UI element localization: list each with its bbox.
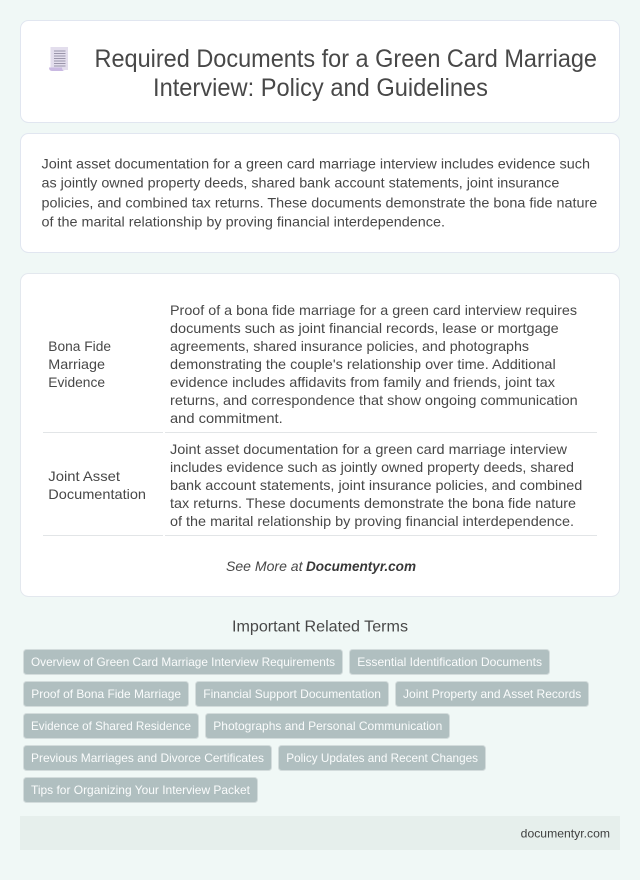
row label: Documentation — [48, 486, 146, 502]
panel: related term tags — [24, 650, 588, 802]
intro text: as jointly owned property deeds, shared bank account statements, joint insurance — [42, 175, 560, 191]
footer bar — [20, 816, 620, 850]
row: bona fide marriage evidence — [48, 302, 578, 426]
row label — [48, 338, 111, 390]
row description: evidence includes affidavits from family and friends, joint tax — [170, 374, 555, 390]
row label: Evidence — [48, 374, 105, 390]
tag: Photographs and Personal Communication — [213, 719, 442, 733]
tag — [278, 746, 486, 770]
tag — [196, 682, 388, 706]
row description — [170, 302, 578, 426]
see more link: See More at — [226, 558, 304, 574]
tag — [350, 650, 550, 674]
row description: bank account statements, joint insurance policies, and combined — [170, 477, 582, 493]
row: joint asset documentation — [48, 441, 582, 529]
row description: and commitment. — [170, 410, 283, 426]
title: Interview: Policy and Guidelines — [153, 74, 488, 102]
panel: evidence table — [20, 274, 620, 596]
panel: intro paragraph — [20, 134, 620, 252]
tag: Proof of Bona Fide Marriage — [31, 687, 181, 701]
tag — [206, 714, 450, 738]
see more link: Documentyr.com — [306, 558, 416, 574]
intro text — [42, 155, 598, 230]
tag: Evidence of Shared Residence — [31, 719, 191, 733]
row label: Marriage — [48, 356, 105, 372]
tag: Joint Property and Asset Records — [403, 687, 581, 701]
see more link — [226, 558, 416, 574]
tag: Tips for Organizing Your Interview Packet — [31, 783, 251, 797]
row description: includes evidence such as jointly owned property deeds, shared — [170, 459, 574, 475]
row description: Proof of a bona fide marriage for a green card interview requires — [170, 302, 577, 318]
title — [94, 45, 597, 102]
panel: title card — [20, 20, 620, 122]
title: Required Documents for a Green Card Marriage — [94, 45, 597, 73]
tag — [396, 682, 588, 706]
row description — [170, 441, 582, 529]
tag — [24, 650, 342, 674]
tag — [24, 746, 272, 770]
row description: Joint asset documentation for a green card marriage interview — [170, 441, 568, 457]
footer bar: documentyr.com — [521, 826, 610, 840]
tag: Previous Marriages and Divorce Certificates — [31, 751, 264, 765]
row description: documents such as joint financial records, lease or mortgage — [170, 320, 559, 336]
tag: Essential Identification Documents — [357, 655, 542, 669]
row label: Joint Asset — [48, 468, 120, 484]
row description: of the marital relationship by proving financial interdependence. — [170, 513, 574, 529]
icon: document — [49, 47, 68, 71]
tag: Overview of Green Card Marriage Interview Requirements — [31, 655, 335, 669]
intro text: policies, and combined tax returns. These documents demonstrate the bona fide nature — [42, 194, 598, 210]
tag — [24, 778, 258, 802]
intro text: Joint asset documentation for a green card marriage interview includes evidence such — [42, 155, 590, 171]
tag — [24, 714, 198, 738]
row description: returns, and correspondence that show ongoing communication — [170, 392, 578, 408]
row label — [48, 468, 146, 502]
tag: Financial Support Documentation — [203, 687, 381, 701]
row description: demonstrating the couple's relationship over time. Additional — [170, 356, 556, 372]
row description: tax returns. These documents demonstrate the bona fide nature — [170, 495, 576, 511]
row description: agreements, shared insurance policies, and photographs — [170, 338, 529, 354]
tag — [24, 682, 188, 706]
intro text: of the marital relationship by proving financial interdependence. — [42, 214, 445, 230]
tag: Policy Updates and Recent Changes — [286, 751, 478, 765]
row label: Bona Fide — [48, 338, 111, 354]
heading: important related terms: Important Related Terms — [232, 619, 408, 636]
